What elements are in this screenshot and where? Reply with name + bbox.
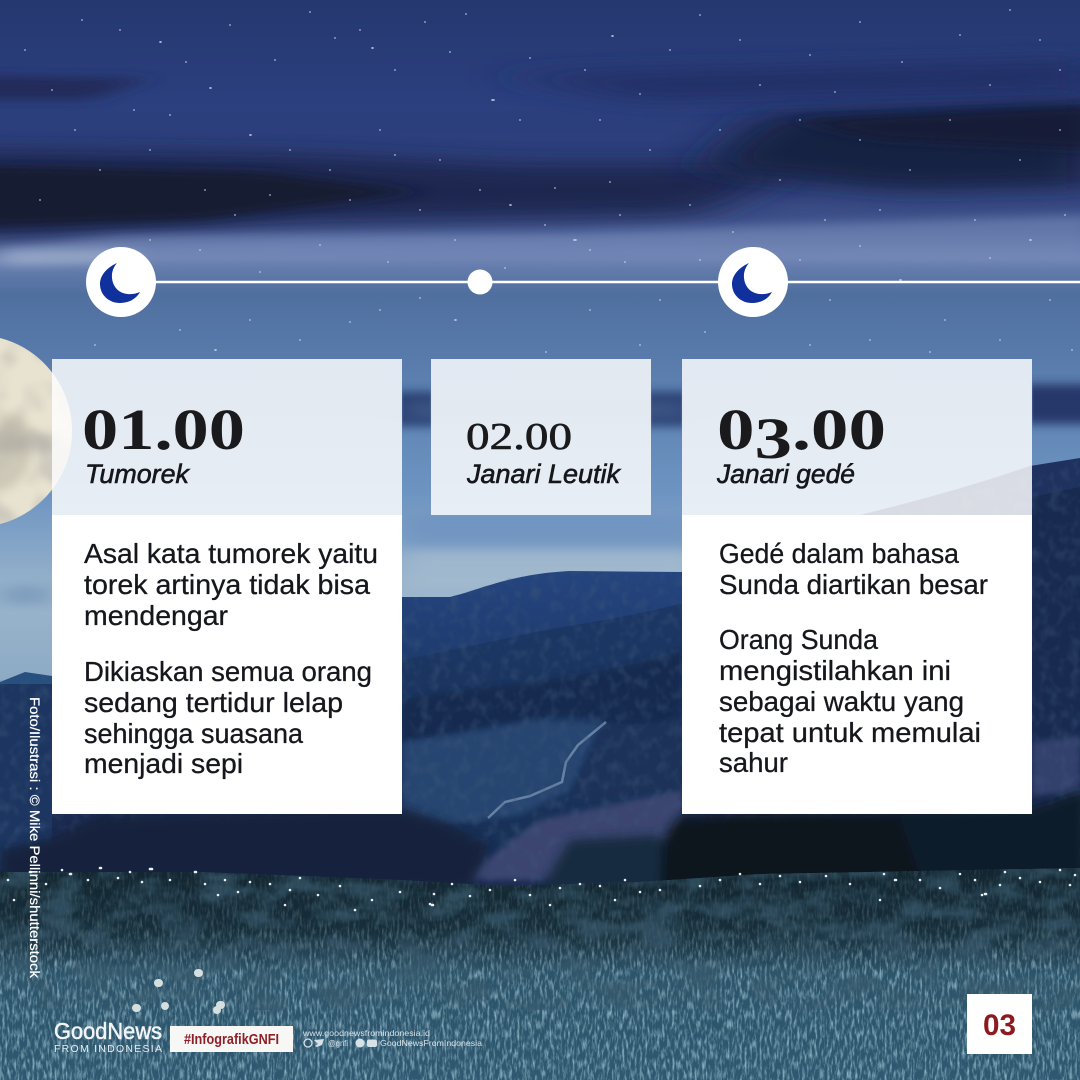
icon: twitter xyxy=(314,1039,324,1047)
logo: GoodNews from Indonesia: GoodNews xyxy=(54,1018,162,1044)
icon: youtube xyxy=(367,1040,377,1047)
subheading: Janari Leutik: Janari Leutik xyxy=(466,459,622,489)
background: distant hills xyxy=(0,458,1080,900)
text block: Janari gede explanation: sebagai waktu yang xyxy=(719,686,964,717)
text block: Janari gede explanation: sahur xyxy=(719,747,788,778)
page number xyxy=(967,994,1032,1054)
white flowers xyxy=(8,868,1075,910)
timeline xyxy=(86,247,1080,317)
page number: 03 xyxy=(983,1009,1016,1042)
heading: 03.00: .00 xyxy=(792,397,886,462)
panel: 02.00 Janari Leutik xyxy=(431,359,651,515)
social links xyxy=(302,1028,482,1048)
text block: Janari gede explanation: tepat untuk memulai xyxy=(719,717,981,748)
text block: Tumorek explanation: Asal kata tumorek yaitu xyxy=(84,538,378,569)
logo: GoodNews from Indonesia: FROM INDONESIA xyxy=(54,1043,162,1055)
text block: Tumorek explanation: Dikiaskan semua orang xyxy=(84,656,372,687)
heading: 03.00: 0 xyxy=(717,397,746,462)
text block: Janari gede explanation: Orang Sunda xyxy=(719,624,878,655)
dark clouds xyxy=(0,60,1080,605)
social links: www.goodnewsfromindonesia.id xyxy=(302,1028,430,1038)
icon: facebook xyxy=(356,1038,364,1048)
subheading: Janari gede: Janari gedé xyxy=(716,459,855,489)
stars xyxy=(25,10,1072,352)
icon: crescent moon 2 xyxy=(718,247,788,317)
moon xyxy=(0,338,72,524)
subheading: Tumorek: Tumorek xyxy=(85,459,191,489)
social links: GoodNewsFromIndonesia xyxy=(380,1038,482,1048)
background: night sky photo xyxy=(0,0,1080,700)
text block: Tumorek explanation: torek artinya tidak bisa xyxy=(84,569,370,600)
marker dot xyxy=(468,270,492,294)
heading: 01.00: 01.00 xyxy=(82,397,245,462)
icon: crescent moon 1 xyxy=(86,247,156,317)
text block: Janari gede explanation: mengistilahkan ini xyxy=(719,655,951,686)
icon: instagram xyxy=(304,1039,312,1047)
text block: Tumorek explanation: sehingga suasana xyxy=(84,718,303,749)
text block: Tumorek explanation: mendengar xyxy=(84,600,228,631)
text block: Janari gede explanation xyxy=(719,538,988,778)
hashtag badge xyxy=(170,1026,293,1052)
text block: Janari gede explanation: Gedé dalam bahasa xyxy=(719,538,959,569)
text block: Tumorek explanation: sedang tertidur lelap xyxy=(84,687,343,718)
photo credit: Foto/Ilustrasi : © Mike Pellinni/shutterstock xyxy=(27,697,42,978)
panel: 01.00 Tumorek xyxy=(52,359,402,814)
hashtag badge: #InfografikGNFI xyxy=(184,1032,279,1048)
background: flower meadow xyxy=(0,860,1080,1080)
text block: Tumorek explanation xyxy=(84,538,378,779)
heading: 03.00: 3 xyxy=(755,406,792,471)
text block: Janari gede explanation: Sunda diartikan besar xyxy=(719,569,988,600)
panel: 03.00 Janari gede xyxy=(682,359,1032,814)
text block: Tumorek explanation: menjadi sepi xyxy=(84,748,243,779)
heading: 02.00: 02.00 xyxy=(466,416,572,458)
dark treeline xyxy=(0,790,1080,890)
social links: @gnfi xyxy=(328,1038,348,1048)
winding river path xyxy=(488,722,606,818)
logo: GoodNews from Indonesia xyxy=(54,1018,162,1055)
